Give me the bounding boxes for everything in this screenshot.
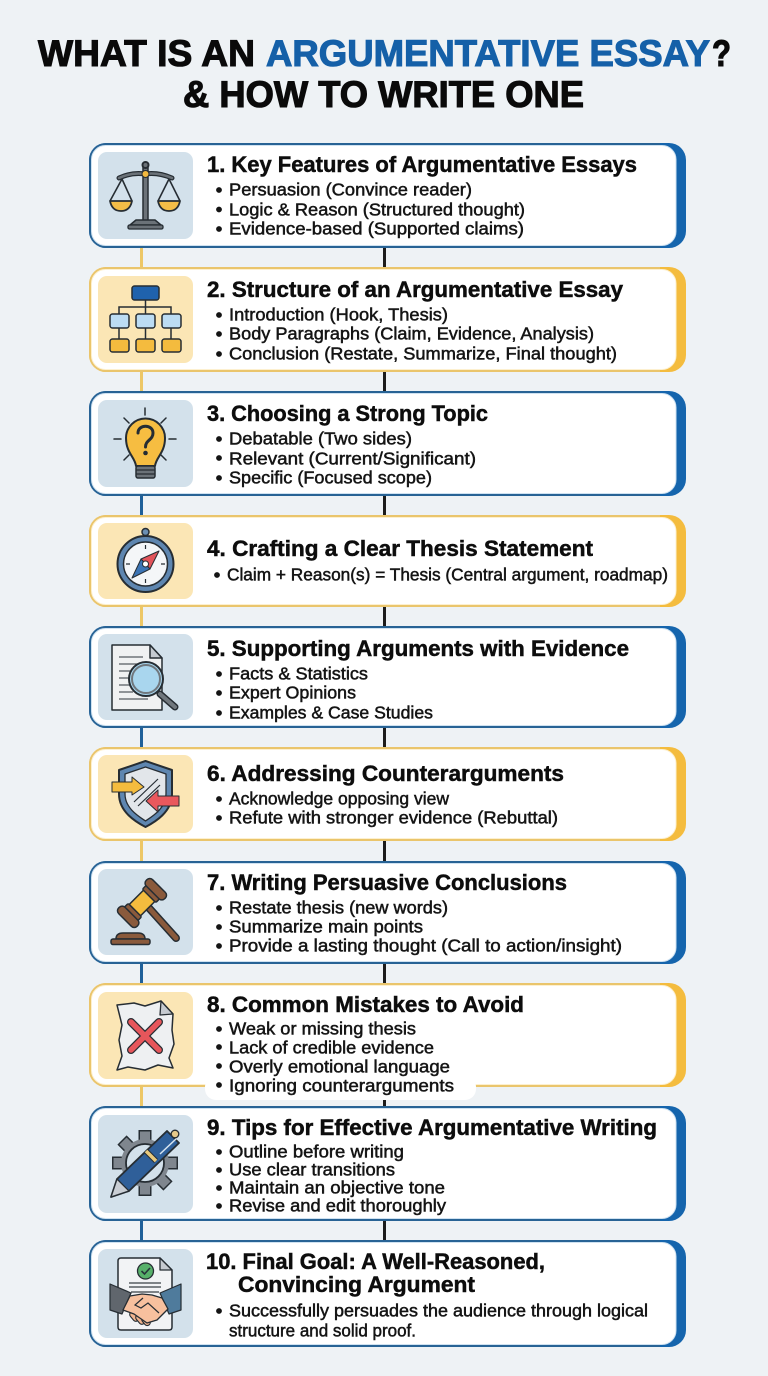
bullet list: Specific (Focused scope) <box>229 468 432 488</box>
bullet list: Refute with stronger evidence (Rebuttal) <box>229 808 558 828</box>
bullet list: Summarize main points <box>229 917 423 937</box>
bullet list <box>216 1301 648 1341</box>
bullet list: Introduction (Hook, Thesis) <box>229 305 448 325</box>
bullet list: Conclusion (Restate, Summarize, Final thought) <box>229 344 617 364</box>
panel: structure <box>89 267 686 372</box>
panel: evidence <box>89 626 686 728</box>
heading: 7. Writing Persuasive Conclusions <box>207 870 567 895</box>
icon: crumpled paper with cross <box>117 1001 174 1070</box>
panel: key features <box>89 143 686 248</box>
icon: balance scales <box>110 162 180 229</box>
heading <box>206 1249 545 1297</box>
bullet list <box>216 1019 454 1096</box>
icon: document with magnifier <box>112 645 175 710</box>
bullet list: Relevant (Current/Significant) <box>229 449 476 469</box>
panel: counterarguments <box>89 747 686 841</box>
bullet list: Acknowledge opposing view <box>229 789 449 809</box>
panel: final goal <box>89 1240 686 1347</box>
bullet list <box>216 664 433 723</box>
title: & HOW TO WRITE ONE <box>183 74 584 115</box>
bullet list: Overly emotional language <box>229 1057 450 1077</box>
icon: gavel <box>111 877 176 944</box>
title: WHAT IS AN <box>38 33 255 74</box>
title: ? <box>712 33 731 74</box>
bullet list: Persuasion (Convince reader) <box>229 180 472 200</box>
heading: 2. Structure of an Argumentative Essay <box>207 277 623 302</box>
bullet list: Successfully persuades the audience through logical <box>229 1301 648 1321</box>
bullet list: Logic & Reason (Structured thought) <box>229 200 525 220</box>
icon: shield with arrows <box>112 761 179 827</box>
panel: tips <box>89 1106 686 1221</box>
bullet list <box>216 789 558 828</box>
panel: conclusions <box>89 861 686 964</box>
bullet list: Outline before writing <box>229 1142 404 1162</box>
bullet list: structure and solid proof. <box>229 1321 416 1341</box>
heading: 6. Addressing Counterarguments <box>207 761 564 786</box>
heading: 8. Common Mistakes to Avoid <box>207 992 524 1017</box>
icon: document with handshake <box>110 1258 181 1330</box>
icon: light bulb <box>114 408 176 478</box>
bullet list: Provide a lasting thought (Call to action/insight) <box>229 936 622 956</box>
bullet list: Ignoring counterarguments <box>229 1076 454 1096</box>
bullet list: Facts & Statistics <box>229 664 368 684</box>
heading: Convincing Argument <box>238 1272 476 1297</box>
bullet list: Body Paragraphs (Claim, Evidence, Analysis) <box>229 324 594 344</box>
heading: 3. Choosing a Strong Topic <box>207 401 488 426</box>
bullet list: Expert Opinions <box>229 683 356 703</box>
heading: 10. Final Goal: A Well-Reasoned, <box>206 1249 545 1274</box>
icon: compass <box>118 528 174 592</box>
heading: 9. Tips for Effective Argumentative Writing <box>207 1115 657 1140</box>
icon: org chart <box>110 286 181 352</box>
bullet list: Lack of credible evidence <box>229 1038 434 1058</box>
bullet list: Revise and edit thoroughly <box>229 1196 446 1216</box>
bullet list: Evidence-based (Supported claims) <box>229 219 524 239</box>
bullet list <box>216 1142 446 1216</box>
panel: thesis statement <box>89 515 686 607</box>
title: ARGUMENTATIVE ESSAY <box>266 33 710 74</box>
panel: choosing a topic <box>89 391 686 496</box>
title <box>38 33 731 115</box>
bullet list: Examples & Case Studies <box>229 703 433 723</box>
bullet list: Weak or missing thesis <box>229 1019 416 1039</box>
heading: 5. Supporting Arguments with Evidence <box>207 636 629 661</box>
panel: common mistakes <box>89 983 686 1100</box>
connector lines <box>140 248 386 1248</box>
bullet list <box>216 180 525 239</box>
bullet list <box>216 429 476 488</box>
bullet list: Use clear transitions <box>229 1160 395 1180</box>
heading: 4. Crafting a Clear Thesis Statement <box>207 536 593 561</box>
bullet list: Maintain an objective tone <box>229 1178 445 1198</box>
heading: 1. Key Features of Argumentative Essays <box>207 152 637 177</box>
icon: gear and pen <box>111 1130 179 1197</box>
bullet list: Debatable (Two sides) <box>229 429 412 449</box>
bullet list <box>216 305 617 364</box>
bullet list: Restate thesis (new words) <box>229 898 448 918</box>
bullet list <box>216 898 622 956</box>
bullet list: Claim + Reason(s) = Thesis (Central argument, roadmap) <box>227 565 668 585</box>
